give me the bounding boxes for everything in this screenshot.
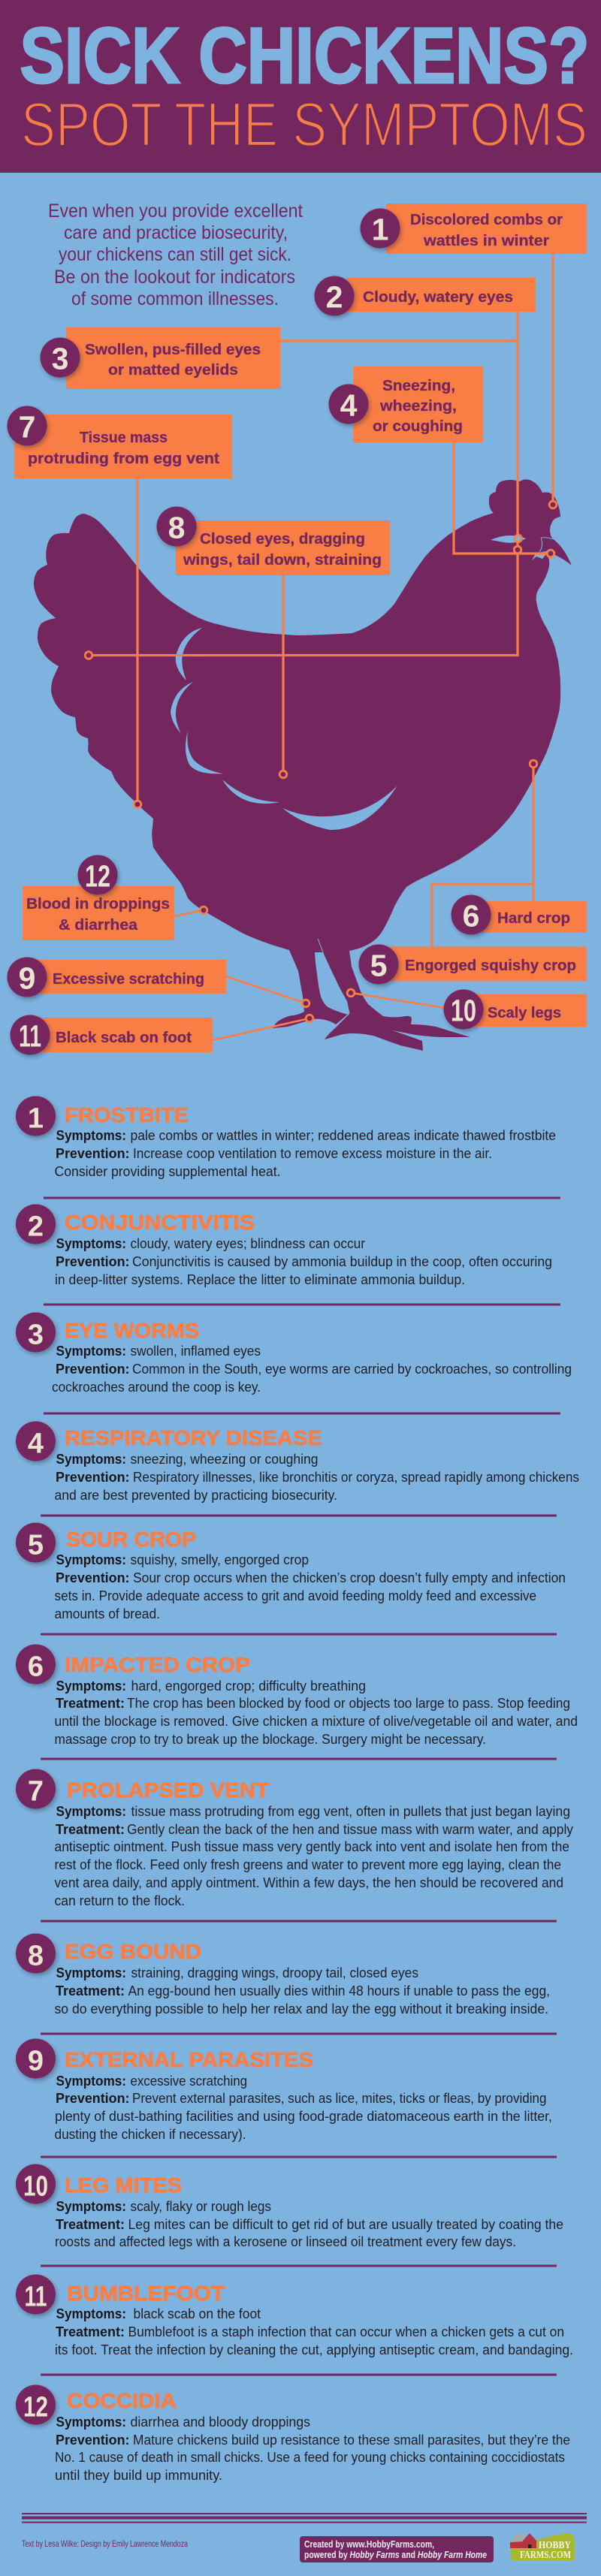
section 4: respiratory disease: RESPIRATORY DISEASE (65, 1426, 322, 1449)
section 8: egg bound (16, 1933, 550, 2016)
callout 4: wheezing, (379, 397, 457, 415)
section 3: eye worms: EYE WORMS (65, 1319, 199, 1342)
section 6: impacted crop (16, 1645, 578, 1747)
callout 5: 5 (370, 948, 387, 982)
section 7: prolapsed vent: Gently clean the back of the hen and tissue mass with warm water, and apply (127, 1822, 573, 1837)
section 11: bumblefoot: its foot. Treat the infection by cleaning the cut, applying antiseptic cream, and bandaging. (55, 2342, 573, 2357)
callout 7: protruding from egg vent (28, 450, 219, 467)
section 4: respiratory disease: Respiratory illnesses, like bronchitis or coryza, spread rapidly among chickens (133, 1470, 579, 1485)
header banner (0, 0, 601, 173)
section 2: conjunctivitis: CONJUNCTIVITIS (65, 1211, 255, 1234)
callout 3: Swollen, pus-filled eyes (85, 341, 261, 358)
callout 7: 7 (19, 410, 35, 445)
section 1: frostbite: Increase coop ventilation to remove excess moisture in the air. (133, 1146, 492, 1161)
section 3: eye worms: Common in the South, eye worms are carried by cockroaches, so controlling (132, 1362, 572, 1377)
callout 4 (329, 366, 483, 442)
section 6: impacted crop: until the blockage is removed. Give chicken a mixture of olive/vegetable oil and water, and (54, 1714, 578, 1729)
section 2: conjunctivitis: Symptoms: (56, 1236, 126, 1251)
section 9: external parasites: Prevention: (56, 2091, 129, 2106)
section 12: coccidia: 12 (23, 2391, 48, 2423)
section 1: frostbite: 1 (28, 1102, 44, 1134)
section 10: leg mites: scaly, flaky or rough legs (131, 2199, 271, 2214)
callout 4: or coughing (373, 418, 463, 435)
section 8: egg bound: straining, dragging wings, droopy tail, closed eyes (131, 1965, 418, 1980)
section 11: bumblefoot: Treatment: (56, 2324, 125, 2339)
section 5: sour crop: Sour crop occurs when the chicken’s crop doesn’t fully empty and infection (133, 1570, 566, 1585)
callout 4: Sneezing, (382, 377, 455, 394)
section 10: leg mites: roosts and affected legs with a kerosene or linseed oil treatment every few days. (55, 2234, 516, 2249)
section 5: sour crop: squishy, smelly, engorged crop (131, 1552, 309, 1567)
section 5: sour crop: sets in. Provide adequate access to grit and avoid feeding moldy feed and excessive (54, 1588, 536, 1603)
section 8: egg bound: An egg-bound hen usually dies within 48 hours if unable to pass the egg, (128, 1983, 550, 1998)
section 2: conjunctivitis: 2 (28, 1211, 44, 1242)
section 3: eye worms: cockroaches around the coop is key. (52, 1380, 261, 1395)
section 1: frostbite: Symptoms: (56, 1128, 126, 1143)
section 3: eye worms: Symptoms: (56, 1344, 126, 1359)
callout 1: Discolored combs or (410, 211, 563, 228)
section 10: leg mites: Symptoms: (56, 2199, 126, 2214)
created-by badge: Created by www.HobbyFarms.com, (304, 2538, 434, 2550)
created-by badge (300, 2536, 494, 2562)
section 4: respiratory disease: Symptoms: (56, 1452, 126, 1467)
section 6: impacted crop: Symptoms: (56, 1679, 126, 1694)
callout 5: Engorged squishy crop (405, 957, 576, 974)
section 6: impacted crop: IMPACTED CROP (65, 1653, 250, 1676)
callout 8 (156, 506, 390, 575)
intro text: of some common illnesses. (71, 288, 279, 309)
section 12: coccidia: Mature chickens build up resistance to these small parasites, but they’re the (133, 2433, 570, 2448)
section 6: impacted crop: hard, engorged crop; difficulty breathing (131, 1679, 366, 1694)
section 8: egg bound: so do everything possible to help her relax and lay the egg without it breaking inside. (54, 2001, 548, 2016)
section 1: frostbite: Consider providing supplemental heat. (54, 1164, 281, 1179)
section 12: coccidia (16, 2385, 570, 2483)
section 1: frostbite: FROSTBITE (65, 1103, 189, 1127)
section 5: sour crop: amounts of bread. (54, 1606, 160, 1621)
intro text: care and practice biosecurity, (64, 222, 288, 243)
callout 12: Blood in droppings (26, 895, 170, 912)
section 3: eye worms (16, 1313, 572, 1395)
callout 12 (23, 855, 174, 940)
callout leader lines (85, 254, 557, 1040)
section 7: prolapsed vent: can return to the flock. (54, 1893, 185, 1908)
section 11: bumblefoot: 11 (24, 2282, 47, 2313)
callout 2: 2 (326, 279, 343, 314)
section 7: prolapsed vent: PROLAPSED VENT (67, 1778, 269, 1802)
section 7: prolapsed vent (16, 1769, 573, 1908)
section 12: coccidia: diarrhea and bloody droppings (131, 2415, 310, 2430)
section 11: bumblefoot: Symptoms: (56, 2306, 126, 2321)
callout 3: or matted eyelids (108, 361, 238, 379)
section 9: external parasites: dusting the chicken if necessary). (54, 2127, 246, 2142)
section 5: sour crop: SOUR CROP (66, 1528, 196, 1551)
section 10: leg mites: Treatment: (56, 2217, 125, 2232)
callout 1 (361, 204, 587, 254)
section 9: external parasites: Prevent external parasites, such as lice, mites, ticks or fleas, by providing (132, 2091, 547, 2106)
callout 12: 12 (85, 859, 110, 894)
section 5: sour crop: Symptoms: (56, 1552, 126, 1567)
section 7: prolapsed vent: 7 (28, 1775, 44, 1807)
section 9: external parasites: excessive scratching (131, 2074, 247, 2089)
section 9: external parasites (16, 2038, 552, 2142)
section 7: prolapsed vent: antiseptic ointment. Push tissue mass very gently back into vent and isolate hen from the (54, 1839, 569, 1854)
logo: Hobby Farms: FARMS.COM (520, 2550, 571, 2561)
callout 11: 11 (19, 1018, 41, 1053)
section 2: conjunctivitis: Prevention: (56, 1254, 129, 1269)
callout 1: wattles in winter (423, 232, 549, 249)
section 6: impacted crop: The crop has been blocked by food or objects too large to pass. Stop feeding (127, 1696, 570, 1711)
intro text: Even when you provide excellent (48, 201, 303, 222)
callout 1: 1 (372, 212, 388, 246)
chicken silhouette (34, 479, 572, 1051)
section 12: coccidia: until they build up immunity. (55, 2468, 222, 2483)
callout 6: 6 (463, 898, 479, 933)
callout 4: 4 (340, 388, 358, 422)
section 10: leg mites: LEG MITES (65, 2173, 182, 2197)
section 8: egg bound: EGG BOUND (65, 1940, 201, 1963)
section 6: impacted crop: 6 (28, 1651, 44, 1682)
callout 7 (8, 406, 232, 478)
credits text: Text by Lesa Wilke; Design by Emily Lawrence Mendoza (22, 2538, 188, 2549)
section 9: external parasites: EXTERNAL PARASITES (65, 2048, 313, 2071)
section 1: frostbite: Prevention: (56, 1146, 129, 1161)
section 12: coccidia: Prevention: (56, 2433, 129, 2448)
section 6: impacted crop: massage crop to try to break up the blockage. Surgery might be necessary. (54, 1732, 486, 1747)
section 5: sour crop: Prevention: (56, 1570, 129, 1585)
section 4: respiratory disease (16, 1421, 579, 1503)
callout 9: 9 (19, 961, 35, 996)
callout 12: & diarrhea (59, 916, 138, 934)
section 11: bumblefoot: BUMBLEFOOT (67, 2282, 225, 2305)
intro text (48, 201, 303, 309)
section 11: bumblefoot: Bumblefoot is a staph infection that can occur when a chicken gets a cut on (128, 2324, 564, 2339)
section 5: sour crop (16, 1523, 566, 1621)
section 7: prolapsed vent: Symptoms: (56, 1804, 126, 1819)
section 10: leg mites: 10 (23, 2170, 48, 2202)
section 2: conjunctivitis: cloudy, watery eyes; blindness can occur (131, 1236, 365, 1251)
callout 3 (41, 327, 281, 389)
callout 10 (443, 990, 587, 1029)
callout 10: 10 (451, 993, 476, 1027)
callout 11: Black scab on foot (56, 1029, 192, 1046)
section 12: coccidia: No. 1 cause of death in small chicks. Use a feed for young chicks containing coccidiostats (55, 2450, 565, 2465)
section 5: sour crop: 5 (28, 1529, 44, 1561)
created-by badge: powered by Hobby Farms and Hobby Farm Home (304, 2549, 487, 2560)
section 1: frostbite (16, 1096, 556, 1179)
callout 5 (359, 945, 587, 984)
section 2: conjunctivitis: Conjunctivitis is caused by ammonia buildup in the coop, often occuring (132, 1254, 552, 1269)
section 4: respiratory disease: 4 (28, 1428, 44, 1460)
section 3: eye worms: swollen, inflamed eyes (131, 1344, 261, 1359)
callout 11 (11, 1015, 213, 1054)
section 9: external parasites: 9 (28, 2046, 44, 2077)
section 7: prolapsed vent: tissue mass protruding from egg vent, often in pullets that just began laying (131, 1804, 570, 1819)
callout 3: 3 (52, 341, 68, 376)
logo: Hobby Farms (510, 2532, 575, 2561)
intro text: your chickens can still get sick. (59, 244, 291, 265)
callout 7: Tissue mass (80, 429, 168, 446)
section 10: leg mites: Leg mites can be difficult to get rid of but are usually treated by coating the (128, 2217, 563, 2232)
section 7: prolapsed vent: Treatment: (56, 1822, 125, 1837)
section 6: impacted crop: Treatment: (56, 1696, 125, 1711)
section 11: bumblefoot: black scab on the foot (134, 2306, 261, 2321)
section 3: eye worms: Prevention: (56, 1362, 129, 1377)
section 9: external parasites: Symptoms: (56, 2074, 126, 2089)
callout 2: Cloudy, watery eyes (363, 288, 513, 306)
section 10: leg mites (16, 2164, 563, 2249)
section 8: egg bound: Symptoms: (56, 1965, 126, 1980)
section 12: coccidia: COCCIDIA (67, 2389, 177, 2412)
section 1: frostbite: pale combs or wattles in winter; reddened areas indicate thawed frostbite (131, 1128, 556, 1143)
section 3: eye worms: 3 (28, 1319, 44, 1350)
callout 8: wings, tail down, straining (183, 551, 382, 569)
section 8: egg bound: Treatment: (56, 1983, 125, 1998)
section 12: coccidia: Symptoms: (56, 2415, 126, 2430)
marker rings (85, 501, 557, 1022)
section 7: prolapsed vent: rest of the flock. Feed only fresh greens and water to prevent more egg laying, clean the (54, 1857, 561, 1872)
callout 6 (451, 895, 587, 934)
section 4: respiratory disease: Prevention: (56, 1470, 129, 1485)
callout 9: Excessive scratching (53, 970, 204, 988)
section 4: respiratory disease: and are best prevented by practicing biosecurity. (54, 1488, 337, 1503)
section 7: prolapsed vent: vent area daily, and apply ointment. Within a few days, the hen should be recovered and (54, 1875, 563, 1890)
logo: Hobby Farms: HOBBY (539, 2540, 571, 2551)
callout 6: Hard crop (497, 909, 570, 927)
section 8: egg bound: 8 (28, 1941, 44, 1972)
callout 10: Scaly legs (488, 1004, 561, 1021)
section 11: bumblefoot (16, 2274, 573, 2357)
intro text: Be on the lookout for indicators (54, 267, 295, 288)
callout 2 (314, 276, 536, 315)
callout 8: Closed eyes, dragging (200, 530, 365, 547)
section 9: external parasites: plenty of dust-bathing facilities and using food-grade diatomaceous earth in the litter, (55, 2109, 552, 2124)
section 2: conjunctivitis (16, 1205, 552, 1287)
callout 8: 8 (168, 511, 185, 545)
section 4: respiratory disease: sneezing, wheezing or coughing (131, 1452, 319, 1467)
callout 9 (8, 957, 227, 997)
section 2: conjunctivitis: in deep-litter systems. Replace the litter to eliminate ammonia buildup. (55, 1272, 465, 1287)
